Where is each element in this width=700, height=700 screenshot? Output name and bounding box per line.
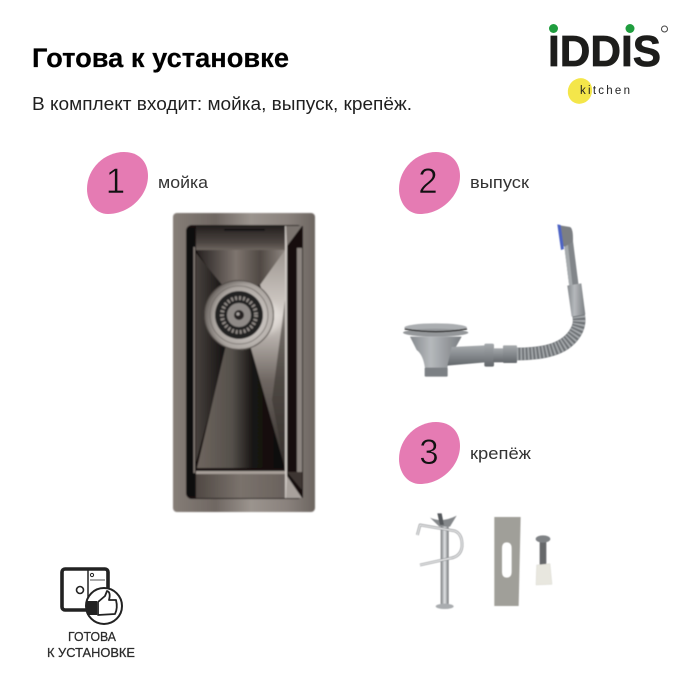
sink: drain glow (249, 302, 281, 334)
title: Готова к установке (32, 43, 289, 73)
screw head (536, 535, 550, 543)
badge 1 (87, 152, 148, 214)
bolt top (430, 516, 457, 527)
hose coupling (503, 345, 517, 363)
sink: front wall (196, 474, 285, 498)
sink: overflow slot (224, 229, 265, 231)
sink: right wall (285, 226, 303, 498)
badge 1: 1 (106, 162, 125, 201)
label: выпуск: выпуск (470, 173, 530, 192)
logo: iddis kitchen (548, 24, 668, 108)
tailpiece (425, 368, 448, 377)
ready-to-install badge: К УСТАНОВКЕ (47, 645, 135, 660)
overflow head (558, 225, 573, 247)
bolt foot (436, 604, 454, 609)
sink: basin floor (194, 247, 286, 473)
icon: thumbs up (86, 588, 122, 624)
strainer cone (410, 337, 462, 368)
fastener photo (417, 513, 552, 609)
overflow hose (517, 312, 579, 354)
label: мойка: мойка (158, 173, 209, 192)
ready-to-install badge (47, 569, 135, 660)
clamp plate (494, 517, 521, 606)
overflow coupling (567, 283, 585, 317)
overflow tube (564, 241, 579, 287)
icon: cabinet (62, 569, 108, 610)
blue tab (557, 224, 564, 250)
logo: iddis kitchen: kitchen (580, 85, 630, 97)
sink: left wall (187, 228, 195, 496)
label: крепёж: крепёж (470, 444, 532, 463)
badge 2 (399, 152, 460, 214)
sink photo (173, 213, 315, 512)
screw sleeve (536, 564, 552, 585)
sink: drain (204, 280, 274, 350)
subtitle: В комплект входит: мойка, выпуск, крепёж. (32, 94, 412, 114)
sink: back wall (196, 226, 285, 250)
logo: iddis kitchen: IDDIS (548, 27, 661, 76)
nut (484, 344, 494, 367)
badge 3 (399, 422, 460, 484)
badge 2: 2 (418, 162, 438, 201)
screw shaft (540, 540, 546, 565)
strainer flange (404, 323, 467, 332)
drain kit photo (403, 224, 585, 377)
horizontal pipe (447, 345, 485, 366)
badge 3: 3 (419, 433, 439, 472)
bolt (441, 523, 449, 605)
badge caption: ГОТОВА (68, 629, 116, 644)
wire clip (417, 525, 462, 565)
